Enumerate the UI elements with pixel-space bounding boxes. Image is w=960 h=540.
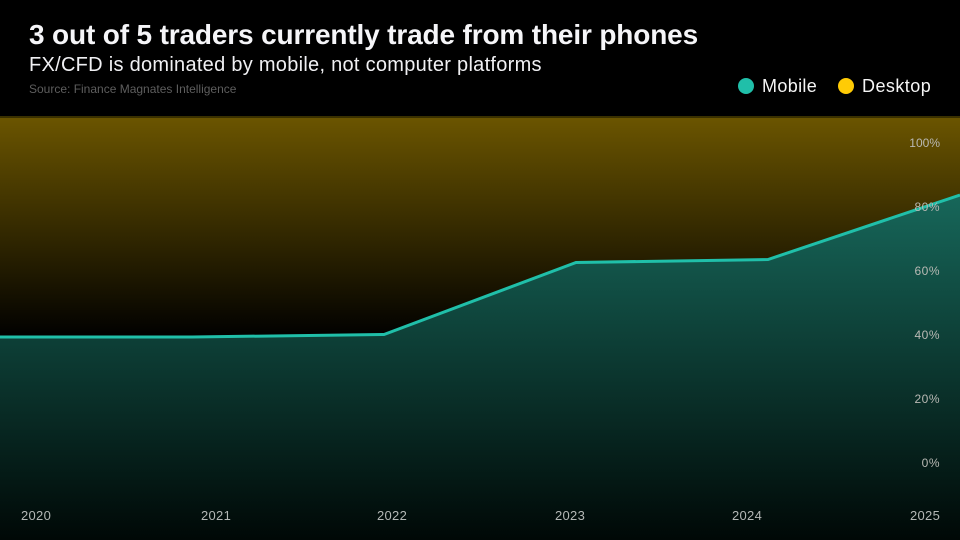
y axis labels: 100% bbox=[909, 136, 940, 150]
y axis labels: 20% bbox=[914, 392, 940, 406]
mobile line bbox=[0, 195, 960, 337]
x axis labels bbox=[21, 508, 940, 523]
y axis labels: 60% bbox=[914, 264, 940, 278]
x axis labels: 2023 bbox=[555, 508, 585, 523]
legend bbox=[738, 76, 931, 96]
title: 3 out of 5 traders currently trade from their phones bbox=[29, 19, 698, 50]
y axis labels bbox=[909, 136, 940, 470]
y axis labels: 0% bbox=[922, 456, 940, 470]
desktop area bbox=[0, 116, 960, 540]
x axis labels: 2020 bbox=[21, 508, 51, 523]
x axis labels: 2024 bbox=[732, 508, 762, 523]
legend item: mobile: Mobile bbox=[762, 76, 817, 96]
x axis labels: 2021 bbox=[201, 508, 231, 523]
y axis labels: 40% bbox=[914, 328, 940, 342]
legend item: desktop: Desktop bbox=[862, 76, 931, 96]
x axis labels: 2022 bbox=[377, 508, 407, 523]
y axis labels: 80% bbox=[914, 200, 940, 214]
legend item: mobile bbox=[738, 76, 817, 96]
mobile area bbox=[0, 195, 960, 540]
source: Source: Finance Magnates Intelligence bbox=[29, 82, 236, 96]
subtitle: FX/CFD is dominated by mobile, not computer platforms bbox=[29, 54, 542, 76]
x axis labels: 2025 bbox=[910, 508, 940, 523]
